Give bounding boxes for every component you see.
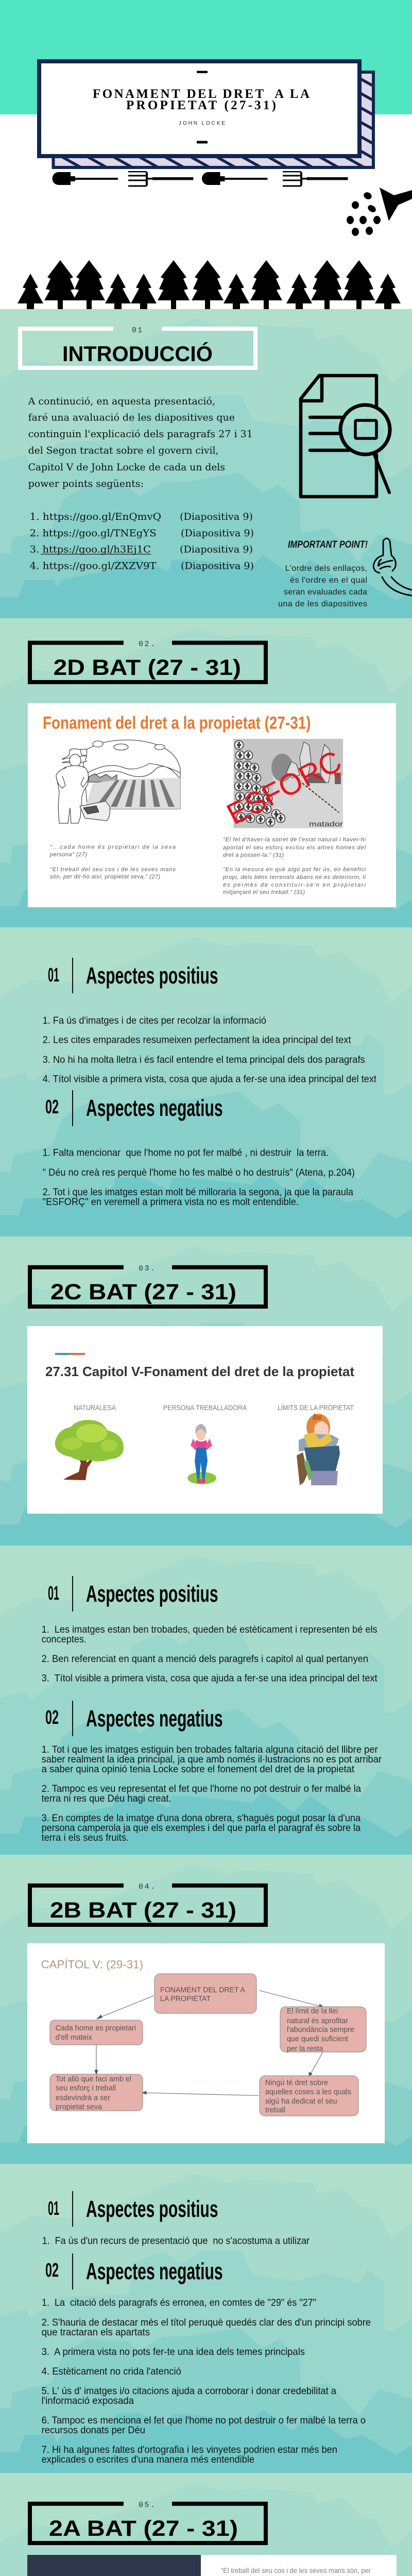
map box: owner: d'ell mateix: [56, 2033, 92, 2042]
list: negative points: 1. La citació dels paragrafs és erronea, en comtes de "29" és "27": [42, 2297, 316, 2309]
list: negative points: 2. S'hauria de destacar més el títol peruquè quedés clar des d'un principi sobre: [42, 2317, 371, 2328]
heading: aspectes positius: Aspectes positius: [86, 1581, 218, 1607]
quotes right: aportat el seu esforç exclou els altres homes del: [223, 845, 366, 851]
list: negative points: terra i els seus fruits.: [42, 1832, 129, 1843]
quotes left: "El treball del seu cos i de les seves mans: [50, 867, 176, 873]
quotes right: és permès de constituir-se'n en propietari: [223, 882, 366, 888]
heading: aspectes negatius: Aspectes negatius: [86, 1705, 223, 1732]
map box: rights: [260, 2076, 358, 2116]
icons: shovels and forks: [53, 171, 348, 187]
list: positive points: 1. Fa ús d'un recurs de presentació que no s'acostuma a utilizar: [42, 2235, 310, 2247]
label: matador: matador: [309, 820, 343, 828]
illustration: boy with stuff: [297, 1413, 340, 1485]
map box: rights: treball: [265, 2106, 285, 2114]
links list: (Diapositiva 9): [180, 511, 253, 522]
list: positive points: 4. Títol visible a primera vista, cosa que ajuda a fer-se una idea principal del text: [43, 1074, 377, 1085]
map box: effort: Tot allò que faci amb el: [56, 2075, 131, 2083]
heading frame: [30, 643, 266, 682]
callout: important point: seran evaluades cada: [284, 588, 367, 597]
map box: rights: Ningú té dret sobre: [265, 2078, 328, 2087]
map box: limit: per la resta: [287, 2044, 323, 2053]
section number: 02.: [139, 640, 155, 649]
links list: (Diapositiva 9): [180, 544, 253, 555]
heading: aspectes negatius: [45, 1090, 223, 1126]
list: negative points: 6. Tampoc es menciona el fet que l'home no pot destruir o fer malbé la terra o: [42, 2415, 366, 2426]
panel: 2A BAT: [0, 2473, 412, 2576]
map box: limit: El límit de la llei: [287, 2007, 338, 2015]
illustration: farmer and field: [56, 740, 180, 823]
links list: 3. https://goo.gl/h3Ej1C: [30, 544, 151, 555]
panel: 2D BAT: [0, 618, 412, 927]
list: negative points: l'informació exposada: [42, 2395, 134, 2406]
map box: root: FONAMENT DEL DRET A: [160, 1986, 245, 1994]
list: negative points: saber realment la idea principal, ja que amb només il·lustracions no es pot arribar: [42, 1754, 382, 1765]
map box: limit: l'abundància sempre: [287, 2025, 354, 2034]
quotes right: mitjançant el seu treball." (31): [223, 889, 305, 895]
heading: aspectes negatius: Aspectes negatius: [86, 2258, 223, 2284]
list: negative points: [43, 1147, 355, 1208]
heading: 2C BAT (27 - 31): [50, 1280, 236, 1304]
panel: 2B BAT: [0, 1855, 412, 2164]
list: negative points: 7. Hi ha algunes faltes d'ortografia i les vinyetes podrien estar més ben: [42, 2444, 337, 2455]
column labels: LÍMITS DE LA PROPIETAT: [278, 1403, 354, 1412]
heading: INTRODUCCIÓ: [62, 341, 213, 366]
list: positive points: 1. Fa ús d'imatges i de cites per recolzar la informació: [43, 1015, 266, 1026]
map box: owner: [50, 2020, 143, 2045]
panel: title card: [39, 61, 373, 167]
panel: 2C BAT evaluation: [0, 1546, 412, 1855]
list: negative points: "ESFORÇ" en veremell a primera vista no es molt entendible.: [43, 1196, 299, 1208]
heading: aspectes negatius: 02: [45, 2260, 59, 2281]
list: negative points: explicades o escrites d'una manera més entendible: [42, 2454, 254, 2465]
slide image: [27, 1326, 383, 1514]
heading: 2B BAT (27 - 31): [50, 1898, 236, 1923]
card body: [39, 61, 359, 156]
list: negative points: que tractaran els apartats: [42, 2327, 150, 2338]
section number: 01: [132, 326, 142, 335]
section number: 03.: [139, 1264, 155, 1273]
heading: aspectes positius: 01: [48, 2198, 59, 2219]
map box: rights: algú ha dedicat el seu: [265, 2097, 337, 2106]
list: negative points: 5. L' ús d' imatges i/o citacions ajuda a corroborar i donar credebilitat a: [42, 2385, 336, 2397]
main title: PROPIETAT (27-31): [126, 98, 276, 112]
slide image: [27, 2555, 397, 2576]
section number: 05.: [139, 2501, 155, 2510]
callout: important point: és l'ordre en el qual: [290, 576, 367, 585]
quotes left: persona" (27): [49, 852, 87, 858]
list: negative points: terra ni res que Déu hagi creat.: [42, 1793, 171, 1804]
panel: introduccio: [0, 309, 412, 618]
intro paragraph: A continució, en aquesta presentació,: [28, 396, 215, 407]
list: positive points: 2. Les cites emparades resumeixen perfectament la idea principal del text: [43, 1035, 351, 1046]
quotes right: [222, 837, 366, 895]
links list: (Diapositiva 9): [181, 561, 254, 572]
column labels: PERSONA TREBALLADORA: [163, 1403, 247, 1412]
icon: pointing hand: [373, 538, 412, 596]
map box: effort: seu esforç i treball: [56, 2083, 116, 2093]
slide title: 27.31 Capitol V-Fonament del dret de la propietat: [45, 1364, 354, 1379]
list: negative points: recursos donats per Déu: [42, 2425, 145, 2436]
quotes right: propi, dels béns terrenals abans no es deteriorin, li: [222, 874, 366, 880]
list: positive points: 3. No hi ha molta lletra i és facil entendre el tema principal dels dos paragrafs: [43, 1054, 365, 1065]
heading: aspectes negatius: [45, 2253, 223, 2290]
quotes right: dret a posseir-la." (31): [223, 852, 284, 858]
icon: document with magnifier: [301, 376, 390, 497]
heading frame: [20, 329, 255, 368]
list: negative points: [42, 1744, 382, 1843]
links list: 4. https://goo.gl/ZXZV9T: [30, 561, 157, 572]
illustration: tree: [55, 1420, 124, 1484]
heading frame: [30, 2504, 266, 2543]
list: negative points: 2. Tampoc es veu representat el fet que l'home no pot destruir o fer malbé la: [42, 1783, 361, 1794]
links list: [30, 511, 254, 572]
heading: aspectes positius: [48, 2191, 218, 2227]
heading frame: [30, 1267, 266, 1307]
heading: aspectes positius: Aspectes positius: [86, 2196, 218, 2222]
quotes right: "En la mesura en què algú pot fer ús, en benefici: [223, 867, 366, 873]
intro paragraph: faré una avaluació de les diapositives que: [28, 412, 235, 423]
heading: 2D BAT (27 - 31): [54, 655, 241, 680]
heading: aspectes positius: Aspectes positius: [86, 962, 218, 989]
card shadow stripes: [54, 72, 373, 167]
links list: (Diapositiva 9): [181, 528, 254, 539]
panel: 2C BAT: [0, 1236, 412, 1546]
main title: [93, 87, 310, 112]
map box: limit: [280, 2007, 366, 2053]
panel: 2D BAT evaluation: [0, 927, 412, 1236]
heading: aspectes positius: 01: [48, 964, 59, 986]
overlay word: ESFORÇ: [221, 744, 347, 832]
links list: 2. https://goo.gl/TNEgYS: [30, 528, 157, 539]
map box: root: [154, 1974, 256, 2013]
slide image: concept map: [27, 1943, 385, 2143]
slide left panel: [27, 2555, 201, 2576]
panel: 2B BAT evaluation: [0, 2164, 412, 2473]
map box: effort: [50, 2074, 143, 2111]
callout: important point: una de les diapositives: [278, 600, 367, 608]
list: negative points: " Déu no creà res perquè l'home ho fes malbé o ho destruís" (Atena, p.204): [43, 1167, 355, 1178]
heading: aspectes negatius: Aspectes negatius: [86, 1095, 223, 1121]
main title: FONAMENT DEL DRET A LA: [93, 87, 310, 101]
column labels: [74, 1403, 354, 1412]
list: positive points: conceptes.: [42, 1634, 87, 1645]
illustration: esforc cartoon: [221, 739, 347, 832]
accent bar: [55, 1353, 70, 1355]
slide title: Fonament del dret a la propietat (27-31): [43, 714, 311, 733]
card ticks: [197, 71, 208, 143]
map box: effort: propietat seva: [56, 2103, 102, 2111]
list: positive points: 1. Les imatges estan ben trobades, queden bé estèticament i representen bé els: [42, 1624, 377, 1635]
section number: 04.: [139, 1883, 155, 1891]
quote 1: "El treball del seu cos i de les seves mans són, per: [221, 2566, 371, 2574]
map box: owner: Cada home es propietari: [56, 2024, 136, 2032]
list: negative points: 1. Falta mencionar que l'home no pot fer malbé , ni destruir la terra.: [43, 1147, 329, 1158]
list: positive points: 3. Títol visible a primera vista, cosa que ajuda a fer-se una idea principal del text: [42, 1673, 377, 1684]
list: negative points: a saber quina opinió tenia Locke sobre el fonement del dret de la propietat: [42, 1764, 355, 1775]
heading: aspectes negatius: 02: [45, 1096, 59, 1118]
links list: 1. https://goo.gl/EnQmvQ: [30, 511, 161, 522]
list: negative points: [42, 2297, 371, 2465]
intro paragraph: del Segon tractat sobre el govern civil,: [28, 445, 218, 456]
heading: aspectes positius: 01: [48, 1583, 59, 1604]
author: JOHN LOCKE: [179, 121, 225, 126]
slide image: [28, 703, 396, 907]
intro paragraph: [28, 396, 253, 489]
list: positive points: [43, 1015, 377, 1085]
quotes left: "...cada home és propietari de la seva: [50, 844, 176, 850]
intro paragraph: Capitol V de John Locke de cada un dels: [28, 462, 225, 473]
quotes left: [49, 844, 176, 880]
list: negative points: 2. Tot i que les imatges estan molt bé milloraria la segona, ja que la paraula: [43, 1187, 353, 1198]
callout: important point: IMPORTANT POINT!: [288, 539, 368, 550]
intro paragraph: power points següents:: [28, 478, 144, 489]
list: positive points: 2. Ben referenciat en quant a menció dels paragrefs i capitol al qual pertanyen: [42, 1653, 368, 1665]
list: positive points: [42, 1624, 377, 1684]
list: negative points: 3. A primera vista no pots fer-te una idea dels temes principals: [42, 2346, 305, 2358]
top band: [0, 0, 412, 114]
heading: aspectes negatius: 02: [45, 1707, 59, 1728]
quotes left: són, per dir-ho així, propietat seva," (27): [50, 874, 160, 880]
list: negative points: 4. Estèticament no crida l'atenció: [42, 2366, 181, 2377]
map box: limit: natural és aprofitar: [287, 2016, 348, 2025]
callout: important point: L'ordre dels enllaços,: [285, 564, 367, 573]
heading: aspectes negatius: [45, 1701, 223, 1736]
callout: important point: [278, 539, 368, 608]
map box: rights: aquelles coses a les quals: [265, 2088, 351, 2096]
slide title: CAPÍTOL V: (29-31): [41, 1958, 143, 1971]
heading: aspectes positius: [48, 1576, 218, 1612]
map box: limit: que quedi suficient: [287, 2035, 349, 2043]
heading: 2A BAT (27 - 31): [49, 2516, 238, 2541]
decoration: row of pine trees: [18, 260, 401, 309]
list: negative points: persona camperola ja que els exemples i del que parla el paragraf és sobre la: [42, 1822, 360, 1834]
map arrows: [95, 1991, 323, 2096]
map box: root: LA PROPIETAT: [160, 1994, 211, 2003]
heading: aspectes positius: [48, 958, 218, 993]
heading frame: [30, 1886, 266, 1925]
list: negative points: 3. En comptes de la imatge d'una dona obrera, s'hagués pogut posar la d'una: [42, 1812, 360, 1824]
icon: watering can: [347, 188, 412, 236]
map box: effort: esdevindrà a ser: [56, 2094, 110, 2102]
intro paragraph: continguin l'explicació dels paragrafs 27 i 31: [28, 429, 253, 440]
quotes right: "El fet d'haver-la sotret de l'estat natural i haver-hi: [223, 837, 366, 843]
column labels: NATURALESA: [74, 1403, 116, 1412]
list: negative points: 1. Tot i que les imatges estiguin ben trobades faltaria alguna citació del llibre per: [42, 1744, 378, 1755]
illustration: working woman: [187, 1424, 216, 1484]
